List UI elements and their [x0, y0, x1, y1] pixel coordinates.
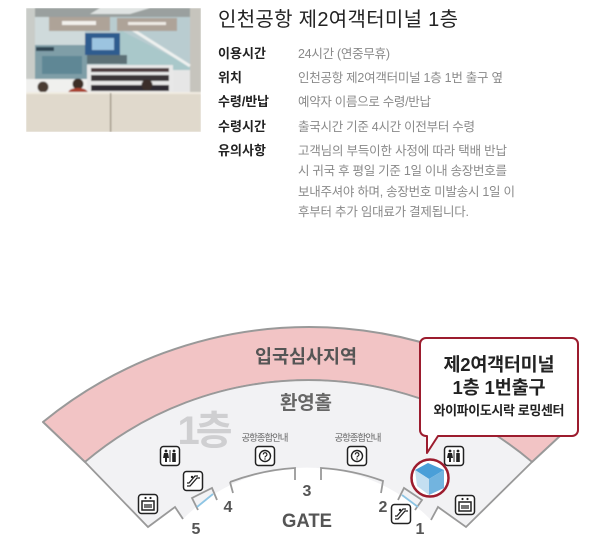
icon: restroom left	[160, 446, 180, 466]
info desk left: 공항종합안내	[242, 433, 288, 444]
icon: elevator left	[138, 494, 158, 514]
info desk right	[334, 433, 382, 466]
floor map	[43, 327, 575, 538]
gate number 1: 1	[416, 521, 425, 538]
row: pickup time: 출국시간 기준 4시간 이전부터 수령	[298, 120, 475, 134]
icon: elevator right	[456, 496, 474, 514]
gate number 4: 4	[224, 499, 233, 516]
icon: location marker cube	[412, 460, 448, 496]
walls	[85, 380, 532, 527]
row: notes	[218, 143, 515, 219]
row: notes: 후부터 추가 임대료가 결제됩니다.	[298, 205, 469, 219]
gate number 5: 5	[192, 521, 201, 538]
label: first floor: 1층	[178, 409, 232, 453]
row: notes: 시 귀국 후 평일 기준 1일 이내 송장번호를	[298, 164, 507, 178]
photo: roaming center counter	[26, 8, 201, 132]
row: notes: 유의사항	[218, 143, 266, 158]
callout: location: 제2여객터미널	[444, 354, 554, 375]
zone: immigration area	[43, 327, 575, 462]
icon: escalator right	[392, 504, 410, 524]
info desk right: 공항종합안내	[334, 433, 382, 444]
row: hours: 이용시간	[218, 46, 266, 61]
callout: location	[420, 338, 578, 453]
row: location: 위치	[218, 70, 242, 85]
info table	[218, 46, 515, 219]
zone: arrivals hall floor	[85, 380, 532, 527]
row: location: 인천공항 제2여객터미널 1층 1번 출구 옆	[298, 70, 503, 85]
row: pickup and return	[218, 94, 431, 109]
row: notes: 보내주셔야 하며, 송장번호 미발송시 1일 이	[298, 185, 515, 199]
row: pickup time	[218, 119, 475, 134]
label: gate: GATE	[282, 511, 332, 532]
row: pickup and return: 수령/반납	[218, 94, 269, 109]
door left	[192, 488, 217, 510]
callout: location: 와이파이도시락 로밍센터	[434, 403, 564, 418]
row: notes: 고객님의 부득이한 사정에 따라 택배 반납	[298, 144, 507, 158]
icon: escalator left	[184, 472, 202, 490]
info desk left	[242, 433, 288, 466]
row: location	[218, 70, 503, 85]
row: hours	[218, 46, 390, 61]
label: arrivals hall: 환영홀	[280, 392, 332, 414]
door right	[398, 488, 422, 510]
row: hours: 24시간 (연중무휴)	[298, 47, 390, 61]
callout: location: 1층 1번출구	[452, 377, 546, 398]
title: 인천공항 제2여객터미널 1층	[218, 8, 458, 31]
row: pickup time: 수령시간	[218, 119, 266, 134]
icon: restroom right	[444, 446, 464, 466]
gate number 2: 2	[379, 499, 388, 516]
gate number 3: 3	[303, 483, 312, 500]
label: immigration area: 입국심사지역	[255, 346, 357, 367]
row: pickup and return: 예약자 이름으로 수령/반납	[298, 94, 431, 109]
